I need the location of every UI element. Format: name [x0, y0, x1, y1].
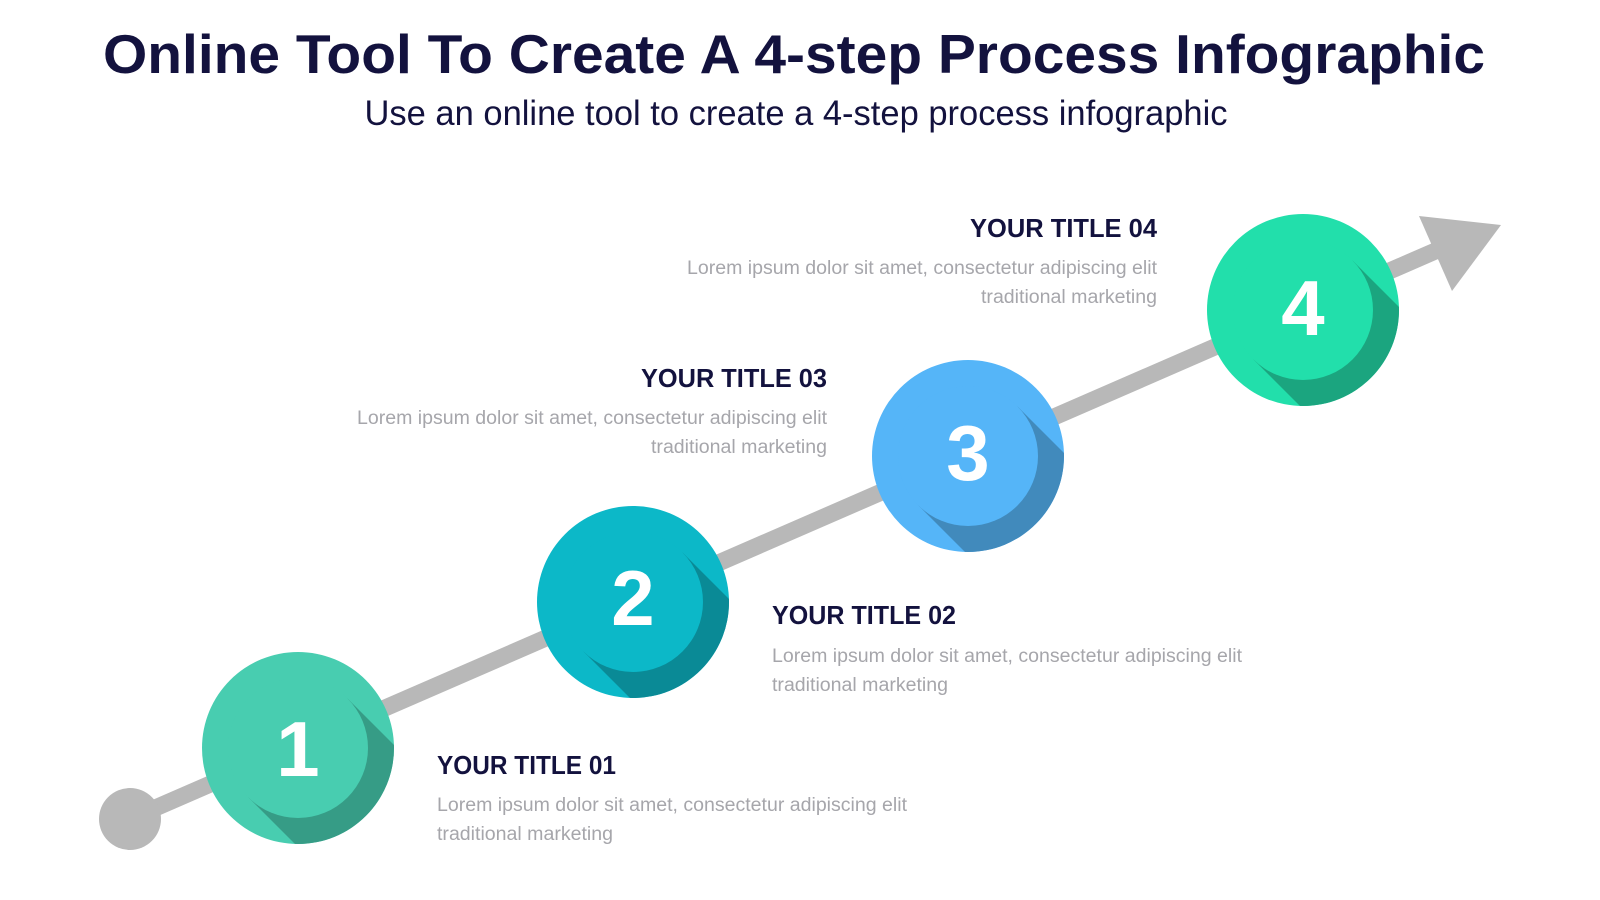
text block: step 4: YOUR TITLE 04 — [970, 213, 1158, 243]
step 2 circle — [537, 506, 729, 698]
step 4 circle: 4 — [1281, 264, 1325, 352]
text block: step 1: traditional marketing — [437, 824, 613, 845]
text block: step 2 — [772, 600, 1243, 696]
step 2 circle: 2 — [611, 554, 655, 642]
step 1 circle: 1 — [276, 705, 320, 793]
text block: step 4: Lorem ipsum dolor sit amet, consectetur adipiscing elit — [687, 258, 1158, 279]
text block: step 3: Lorem ipsum dolor sit amet, consectetur adipiscing elit — [357, 408, 828, 429]
text block: step 3: traditional marketing — [651, 437, 827, 458]
text block: step 2: YOUR TITLE 02 — [772, 600, 956, 630]
text block: step 3: YOUR TITLE 03 — [641, 363, 827, 393]
arrow: growth line — [99, 216, 1501, 850]
title: Online Tool To Create A 4-step Process Infographic — [103, 23, 1485, 85]
subtitle: Use an online tool to create a 4-step process infographic — [364, 94, 1228, 133]
text block: step 3 — [357, 363, 828, 458]
text block: step 2: Lorem ipsum dolor sit amet, consectetur adipiscing elit — [772, 646, 1243, 667]
text block: step 1: YOUR TITLE 01 — [437, 750, 616, 780]
text block: step 1: Lorem ipsum dolor sit amet, consectetur adipiscing elit — [437, 795, 908, 816]
text block: step 1 — [437, 750, 908, 845]
step 1 circle — [202, 652, 394, 844]
text block: step 2: traditional marketing — [772, 675, 948, 696]
text block: step 4: traditional marketing — [981, 287, 1157, 308]
step 4 circle — [1207, 214, 1399, 406]
step 3 circle: 3 — [946, 409, 990, 497]
text block: step 4 — [687, 213, 1158, 308]
step 3 circle — [872, 360, 1064, 552]
